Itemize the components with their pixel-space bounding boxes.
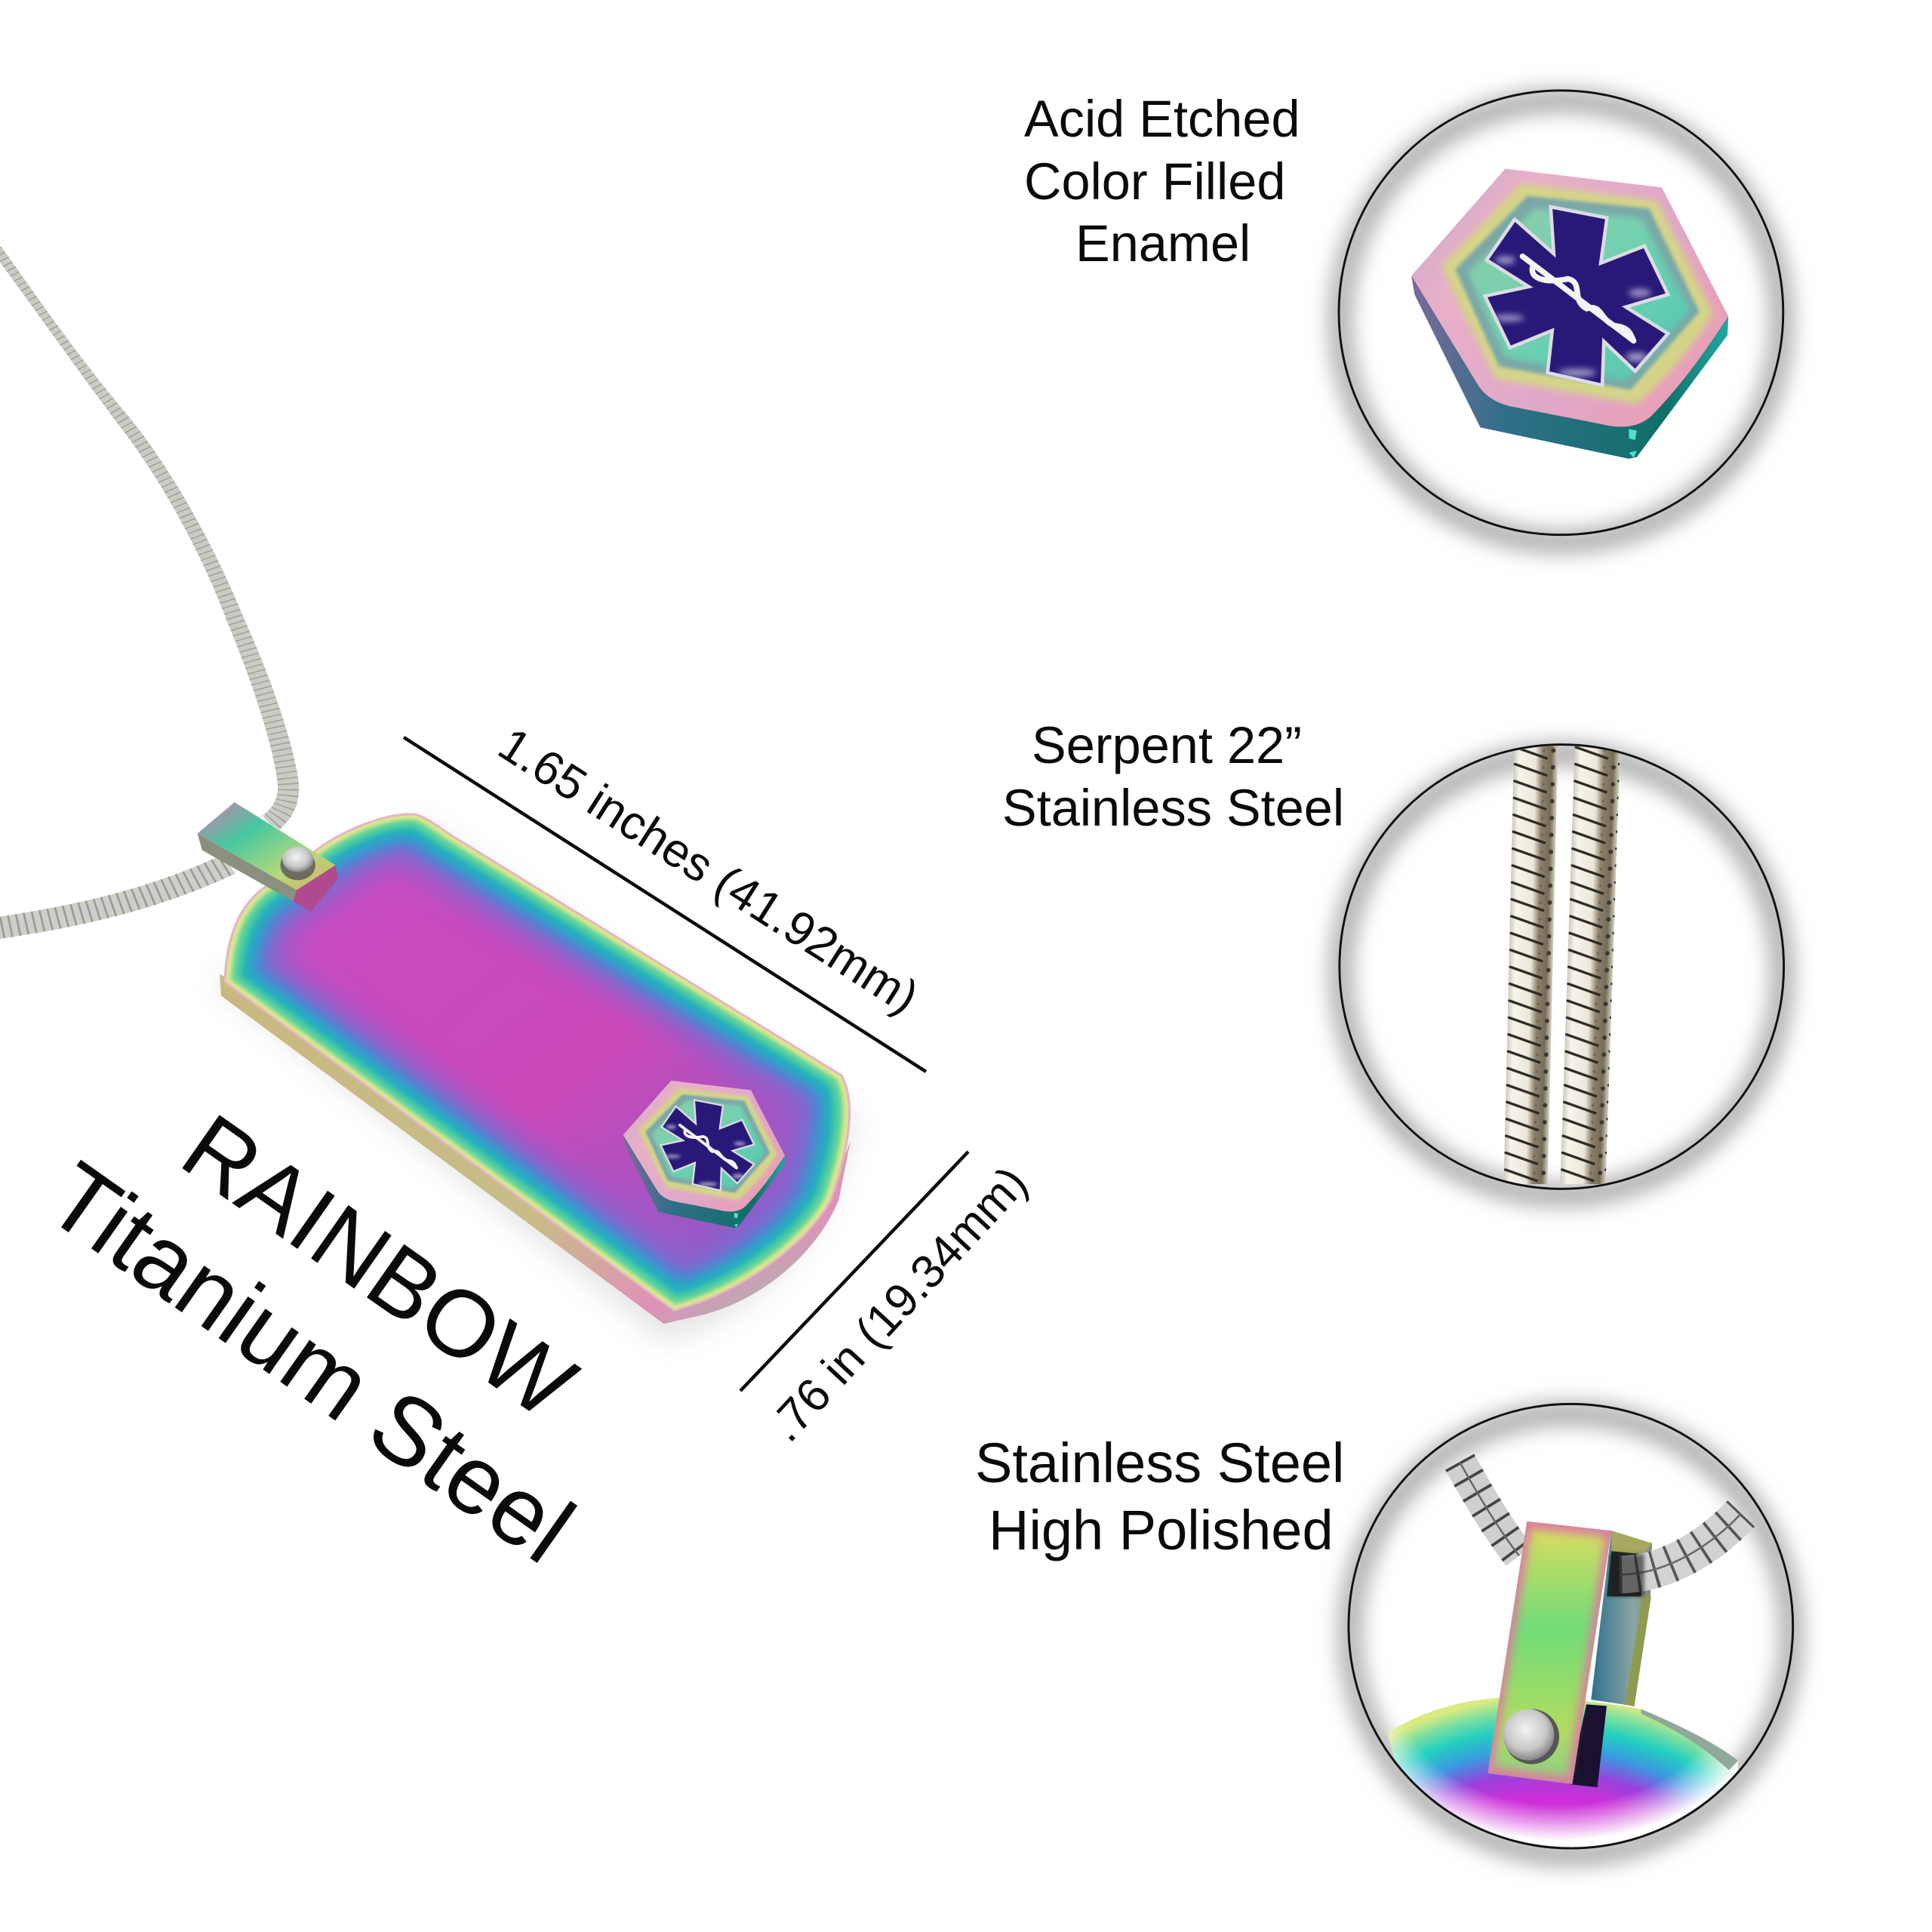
circle shadow	[1341, 754, 1783, 1195]
tag side edge	[220, 974, 851, 1324]
tag rainbow face	[223, 814, 851, 1312]
bail lower dark	[1569, 1704, 1607, 1787]
label: chain	[1002, 716, 1344, 837]
product title: Titanium Steel: Titanium Steel	[29, 1142, 592, 1584]
chain shadow inside bail	[1610, 1554, 1644, 1596]
label: bail: Stainless Steel	[975, 1432, 1345, 1494]
bail top slab	[1611, 1531, 1652, 1555]
serpent chain lower	[0, 864, 229, 929]
circle detail: bail	[1347, 1404, 1793, 1866]
bail opening	[1607, 1551, 1643, 1596]
label: enamel: Color Filled	[1024, 152, 1285, 211]
circle outline	[1339, 91, 1783, 535]
chain strands	[1504, 746, 1620, 1184]
rivet	[1504, 1709, 1559, 1764]
label: enamel: Acid Etched	[1024, 90, 1300, 148]
chain left	[1460, 1462, 1519, 1555]
label: chain: Serpent 22”	[1032, 716, 1302, 774]
dome fade	[1388, 1724, 1738, 1847]
label: enamel: Enamel	[1075, 214, 1251, 272]
necklace pendant	[0, 249, 876, 1343]
dimension line: width	[740, 1152, 968, 1391]
circle outline	[1340, 745, 1784, 1189]
label: bail	[975, 1432, 1345, 1561]
bail side	[1591, 1531, 1652, 1706]
dimension label: width: .76 in (19.34mm)	[759, 1157, 1038, 1452]
tag dome	[1387, 1698, 1739, 1847]
tag shadow	[216, 818, 856, 1343]
label: chain: Stainless Steel	[1002, 779, 1344, 837]
serpent chain upper	[0, 249, 288, 823]
label: enamel	[1024, 90, 1300, 272]
bail front	[1487, 1521, 1611, 1784]
medical hexagon emblem	[623, 1081, 785, 1228]
dimension label: length: 1.65 inches (41.92mm)	[489, 718, 928, 1024]
product title: RAINBOW: RAINBOW	[165, 1094, 593, 1439]
circle detail: enamel emblem	[1339, 91, 1783, 542]
tag back edge	[1641, 1709, 1738, 1770]
bail right rail	[1625, 1596, 1651, 1706]
dimension line: length	[404, 737, 926, 1072]
circle outline	[1349, 1404, 1793, 1848]
label: bail: High Polished	[989, 1499, 1334, 1561]
circle detail: serpent chain	[1340, 745, 1784, 1195]
chain right	[1620, 1513, 1741, 1574]
bail with rivet	[198, 802, 338, 912]
circle shadow	[1340, 100, 1782, 542]
enlarged hexagon emblem	[1411, 169, 1728, 459]
circle shadow	[1350, 1414, 1792, 1854]
